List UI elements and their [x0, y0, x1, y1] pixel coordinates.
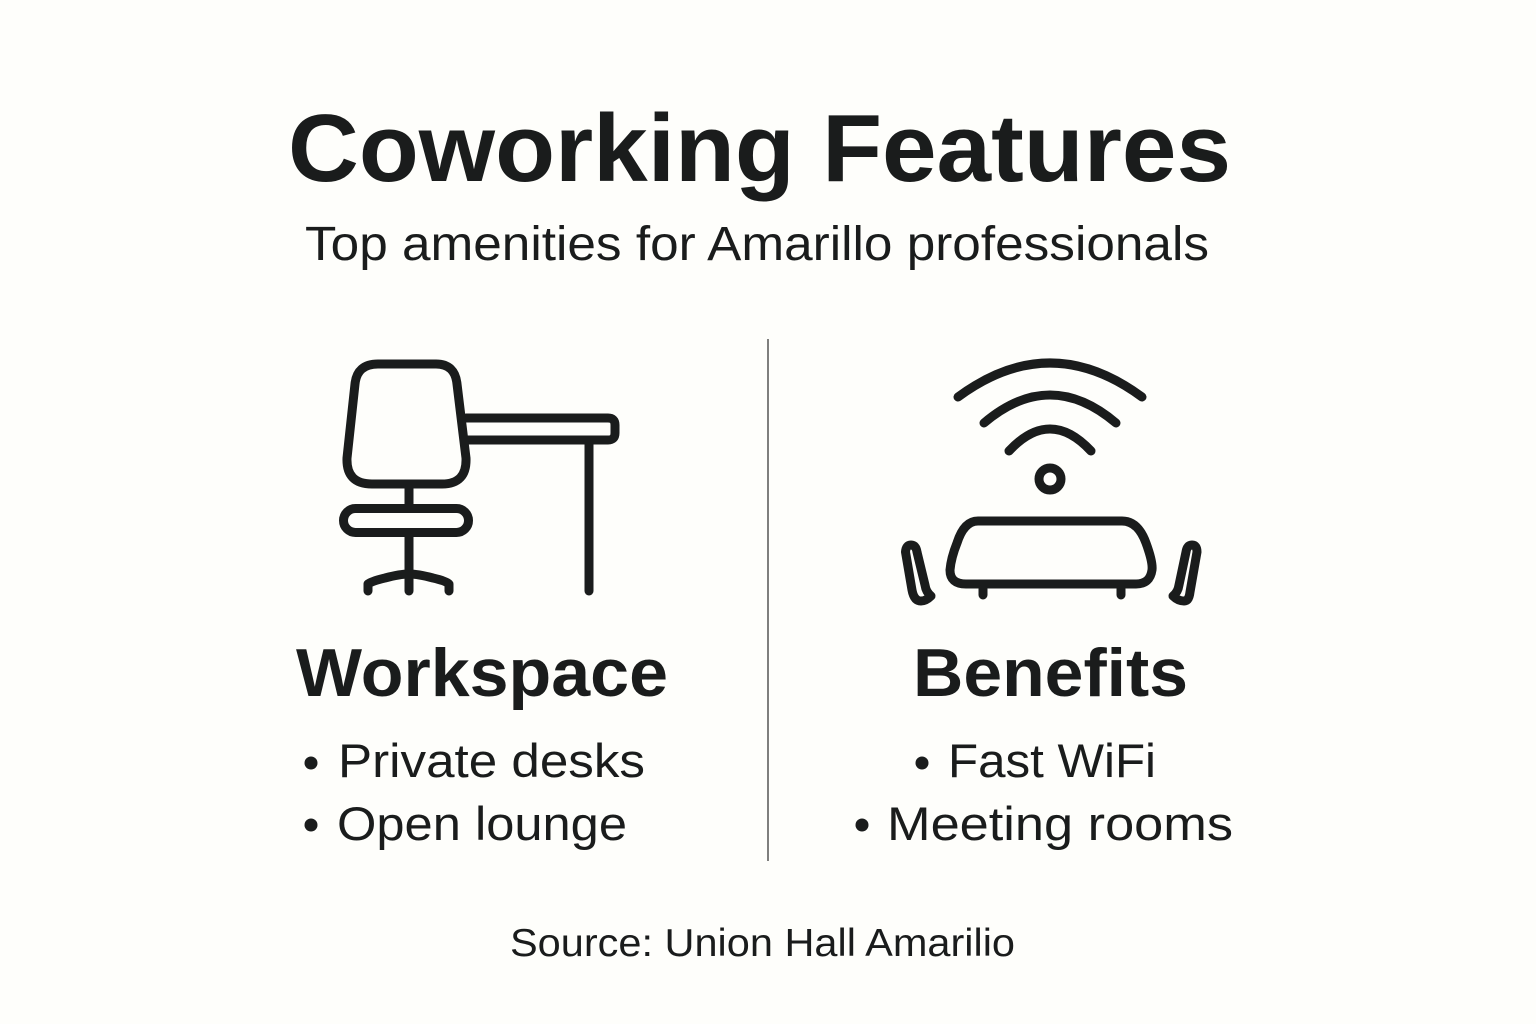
title: Coworking Features: [288, 95, 1231, 202]
heading: benefits: Benefits: [913, 635, 1188, 711]
list: workspace items: Open lounge: [337, 797, 627, 850]
list: workspace items: [304, 734, 645, 850]
icon: wifi over lounge seating: [906, 363, 1197, 601]
panel: workspace: [296, 364, 668, 850]
list: benefits items: Fast WiFi: [948, 734, 1156, 787]
list: workspace items: Private desks: [338, 734, 645, 787]
panel: benefits: [856, 363, 1233, 850]
list: benefits items: [856, 734, 1233, 850]
list: benefits items: Meeting rooms: [887, 797, 1233, 850]
source note: Source: Union Hall Amarilio: [510, 922, 1015, 965]
icon: desk and chair: [344, 364, 615, 591]
heading: workspace: Workspace: [296, 635, 668, 711]
subtitle: Top amenities for Amarillo professionals: [305, 218, 1209, 271]
